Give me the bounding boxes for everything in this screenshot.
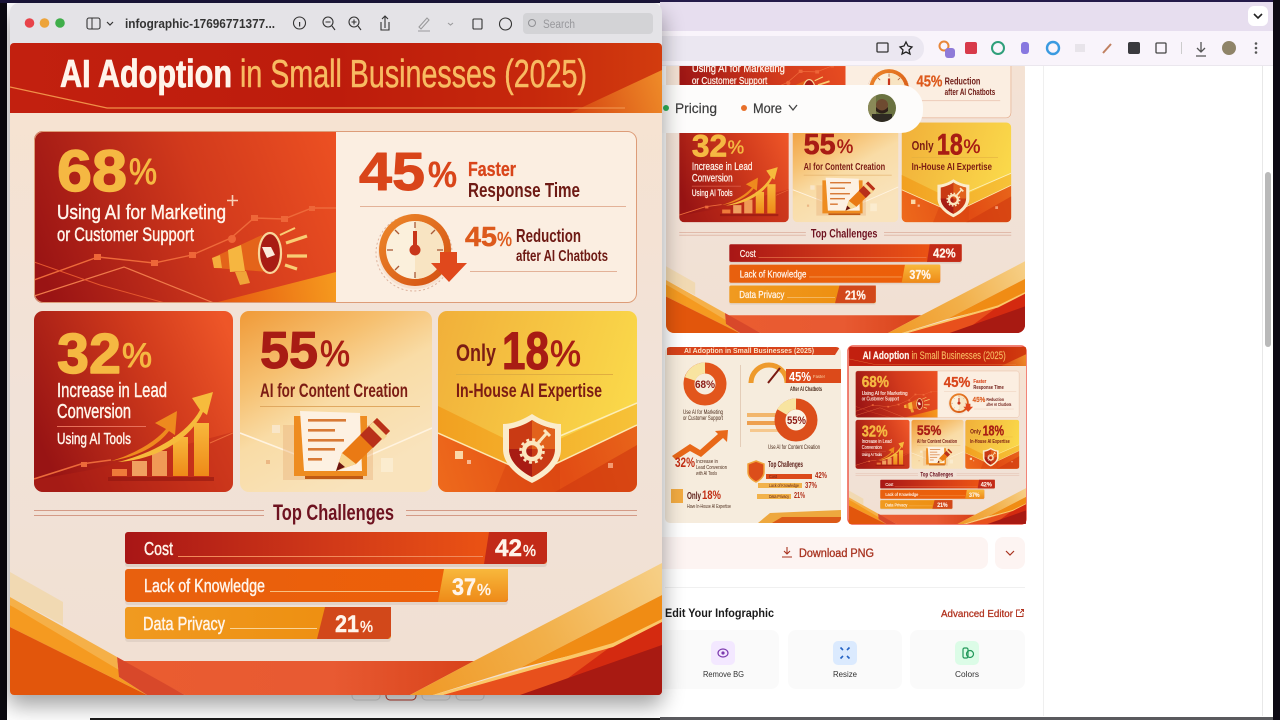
title bar: Search: [543, 19, 575, 31]
card: only 18 percent: 18: [502, 322, 549, 381]
thumbnail text: Faster: [973, 379, 987, 385]
alternate design thumbnail: 32%: [675, 454, 695, 470]
thumbnail text: 55%: [917, 422, 942, 438]
alternate design thumbnail: Have In-House AI Expertise: [687, 504, 731, 510]
card: only 18 percent: Only: [456, 340, 496, 367]
thumbnail text: 21%: [937, 502, 948, 509]
preview text: Using AI for Marketing: [692, 63, 785, 75]
alternate design thumbnail: 37%: [805, 481, 817, 490]
thumbnail text: 45%: [944, 375, 970, 391]
thumbnail text: 32%: [862, 424, 888, 441]
card: 32 percent: Using AI Tools: [57, 431, 131, 448]
stat: 45 percent faster: [359, 142, 580, 202]
tool: resize: Resize: [833, 669, 857, 679]
alternate design thumbnail: Data Privacy: [769, 494, 790, 499]
alternate design thumbnail: 21%: [794, 491, 805, 500]
preview text: 37%: [909, 268, 931, 282]
download button: [640, 537, 988, 569]
alternate design thumbnail: 18%: [702, 488, 721, 502]
alternate design thumbnail: Cost: [769, 474, 778, 479]
card: only 18 percent: [456, 322, 602, 402]
preview text: %: [837, 136, 853, 158]
preview text: 18: [937, 129, 963, 161]
stat: 68 percent: [57, 139, 226, 246]
thumbnail text: AI for Content Creation: [917, 439, 957, 445]
thumbnail text: Lack of Knowledge: [885, 492, 918, 498]
gauge and 45: Faster: [813, 374, 825, 379]
preview text: In-House AI Expertise: [912, 162, 992, 173]
stat: 45 percent reduction: Reduction: [516, 226, 581, 246]
browser tab bar: [660, 0, 1280, 31]
alternate design thumbnail: Lack of Knowledge: [769, 483, 799, 488]
thumbnail text: 18%: [983, 423, 1004, 439]
window shadow: [7, 14, 663, 706]
card: 32 percent: Conversion: [57, 401, 131, 423]
top challenges heading: Top Challenges: [273, 500, 394, 525]
bar: data privacy: 21: [335, 611, 359, 638]
alternate design thumbnail: with AI Tools: [695, 471, 717, 477]
card: 55 percent: 55: [260, 322, 318, 380]
thumbnail text: In-House AI Expertise: [970, 439, 1010, 445]
navigation pill: [663, 85, 923, 133]
title: in Small Businesses (2025): [240, 53, 587, 96]
preview text: %: [963, 136, 980, 158]
title bar: infographic-17696771377...: [125, 17, 275, 31]
alternate design thumbnail: Only: [687, 491, 701, 502]
thumbnail text: Increase in Lead: [862, 439, 892, 445]
stat: 45 percent faster: Faster: [468, 159, 516, 181]
preview text: AI for Content Creation: [804, 162, 885, 173]
preview text: 32: [692, 129, 727, 164]
stat: 68 percent: %: [129, 151, 157, 192]
alternate design thumbnail: Top Challenges: [768, 460, 803, 469]
preview text: Cost: [740, 249, 756, 260]
preview text: %: [728, 136, 744, 157]
alternate design thumbnail: Increase in: [696, 459, 718, 465]
avatar: [868, 94, 896, 122]
stat: 68 percent: Using AI for Marketing: [57, 202, 226, 224]
growth arrow: [672, 430, 728, 460]
navigation pill: More: [753, 100, 782, 116]
bar: cost: 42: [495, 535, 522, 562]
bar: cost: Cost: [144, 539, 173, 559]
title: [60, 53, 587, 96]
donut 68: 68%: [695, 379, 715, 391]
preview text: after AI Chatbots: [945, 87, 995, 97]
preview text: Data Privacy: [739, 290, 784, 301]
thumbnail text: 68%: [862, 374, 889, 391]
stat: 68 percent: or Customer Support: [57, 225, 195, 246]
tool: colors: [910, 630, 1025, 689]
download button: Download PNG: [799, 548, 874, 560]
card: 32 percent: [57, 322, 167, 448]
bar: data privacy: %: [360, 619, 373, 636]
thumbnail text: Cost: [885, 482, 894, 488]
tool: colors: Colors: [955, 669, 979, 679]
thumbnail text: 45%: [973, 395, 986, 404]
thumbnail text: Only: [970, 428, 981, 435]
preview text: 68: [692, 27, 730, 63]
tool: resize: [788, 630, 902, 689]
thumbnail text: after AI Chatbots: [986, 402, 1012, 407]
bar: lack of knowledge: %: [477, 582, 491, 599]
thumbnail text: Using AI Tools: [862, 452, 882, 457]
preview text: or Customer Support: [692, 76, 767, 87]
scrollbar: [1265, 172, 1271, 347]
card: 32 percent: %: [122, 337, 152, 375]
donut 55: [747, 404, 812, 436]
thumbnail text: Top Challenges: [920, 472, 954, 478]
card: only 18 percent: In-House AI Expertise: [456, 381, 602, 402]
main infographic: [10, 43, 662, 695]
alternate design thumbnail: 42%: [815, 471, 827, 480]
thumbnail text: AI Adoption: [863, 350, 909, 362]
card: 55 percent: [260, 322, 408, 402]
card: only 18 percent: %: [550, 333, 581, 374]
bar: lack of knowledge: [144, 574, 491, 601]
title: AI Adoption: [60, 53, 232, 96]
title bar: [10, 13, 662, 43]
shield and challenges: [748, 461, 764, 482]
preview text: [692, 66, 995, 300]
gauge and 45: 45%: [789, 369, 811, 384]
preview text: Only: [912, 138, 934, 153]
pagination behind window: [352, 680, 484, 700]
thumbnail text: or Customer Support: [862, 397, 899, 403]
alternate design thumbnail: AI Adoption in Small Businesses (2025): [684, 348, 814, 355]
preview text: Conversion: [692, 172, 733, 184]
alternate design thumbnail: After AI Chatbots: [790, 387, 822, 393]
background infographic preview: [666, 66, 1025, 333]
bar: data privacy: Data Privacy: [143, 614, 225, 634]
tool: remove background: [640, 630, 779, 689]
bar: lack of knowledge: Lack of Knowledge: [144, 576, 265, 596]
donut 68: [689, 368, 721, 400]
preview text: Lack of Knowledge: [740, 269, 807, 280]
thumbnail text: 42%: [981, 481, 992, 488]
card: 32 percent: 32: [57, 322, 121, 386]
edit heading: Edit Your Infographic: [665, 608, 775, 620]
preview text: Reduction: [945, 77, 980, 88]
bar: data privacy: [143, 611, 373, 638]
gauge and 45: [751, 365, 841, 384]
bar: cost: %: [523, 543, 536, 560]
preview text: Top Challenges: [811, 227, 878, 241]
donut 55: 55%: [787, 415, 806, 427]
stat: 68 percent: 68: [57, 139, 127, 204]
thumbnail text: Using AI for Marketing: [862, 391, 908, 397]
alternate design thumbnail: [665, 347, 841, 523]
preview text: 21%: [845, 288, 866, 302]
preview text: 42%: [933, 246, 956, 260]
thumbnail text: Reduction: [986, 397, 1004, 403]
alternate design thumbnail: or Customer Support: [683, 415, 723, 422]
thumbnail text: [862, 350, 1012, 509]
selected thumbnail: [848, 346, 1026, 524]
bar: lack of knowledge: 37: [452, 574, 476, 601]
thumbnail text: in Small Businesses (2025): [911, 350, 1006, 362]
thumbnail text: 37%: [969, 492, 980, 499]
alternate design thumbnail: Lead Conversion: [696, 465, 727, 471]
thumbnail text: Response Time: [973, 385, 1004, 391]
tool: remove background: Remove BG: [703, 669, 744, 679]
preview app window: [10, 3, 662, 695]
stat: 45 percent reduction: %: [497, 229, 512, 251]
preview text: 45%: [917, 74, 943, 91]
browser toolbar: [640, 31, 1280, 66]
thumbnail text: Conversion: [862, 445, 882, 451]
alternate design thumbnail: Use AI for Marketing: [683, 409, 723, 416]
card: 55 percent: %: [320, 333, 350, 374]
card: 55 percent: AI for Content Creation: [260, 381, 408, 402]
stat: 45 percent faster: Response Time: [468, 180, 580, 202]
preview text: Using AI Tools: [692, 188, 733, 198]
card: 32 percent: Increase in Lead: [57, 380, 167, 402]
stat: 45 percent faster: %: [428, 154, 457, 195]
navigation pill: Pricing: [675, 100, 717, 116]
advanced editor link: Advanced Editor: [941, 609, 1014, 620]
stat: 45 percent reduction: 45: [465, 221, 497, 252]
download options button: [995, 537, 1025, 569]
stat: 45 percent faster: 45: [359, 142, 425, 202]
thumbnail text: Data Privacy: [885, 502, 908, 508]
preview text: 55: [804, 129, 836, 161]
stat: 45 percent reduction: after AI Chatbots: [516, 248, 608, 265]
preview text: Increase in Lead: [692, 161, 752, 173]
stat: 45 percent reduction: [465, 221, 608, 265]
bar: cost: [144, 535, 536, 562]
cursor crosshair: [227, 195, 238, 206]
alternate design thumbnail: Use AI for Content Creation: [768, 444, 820, 451]
